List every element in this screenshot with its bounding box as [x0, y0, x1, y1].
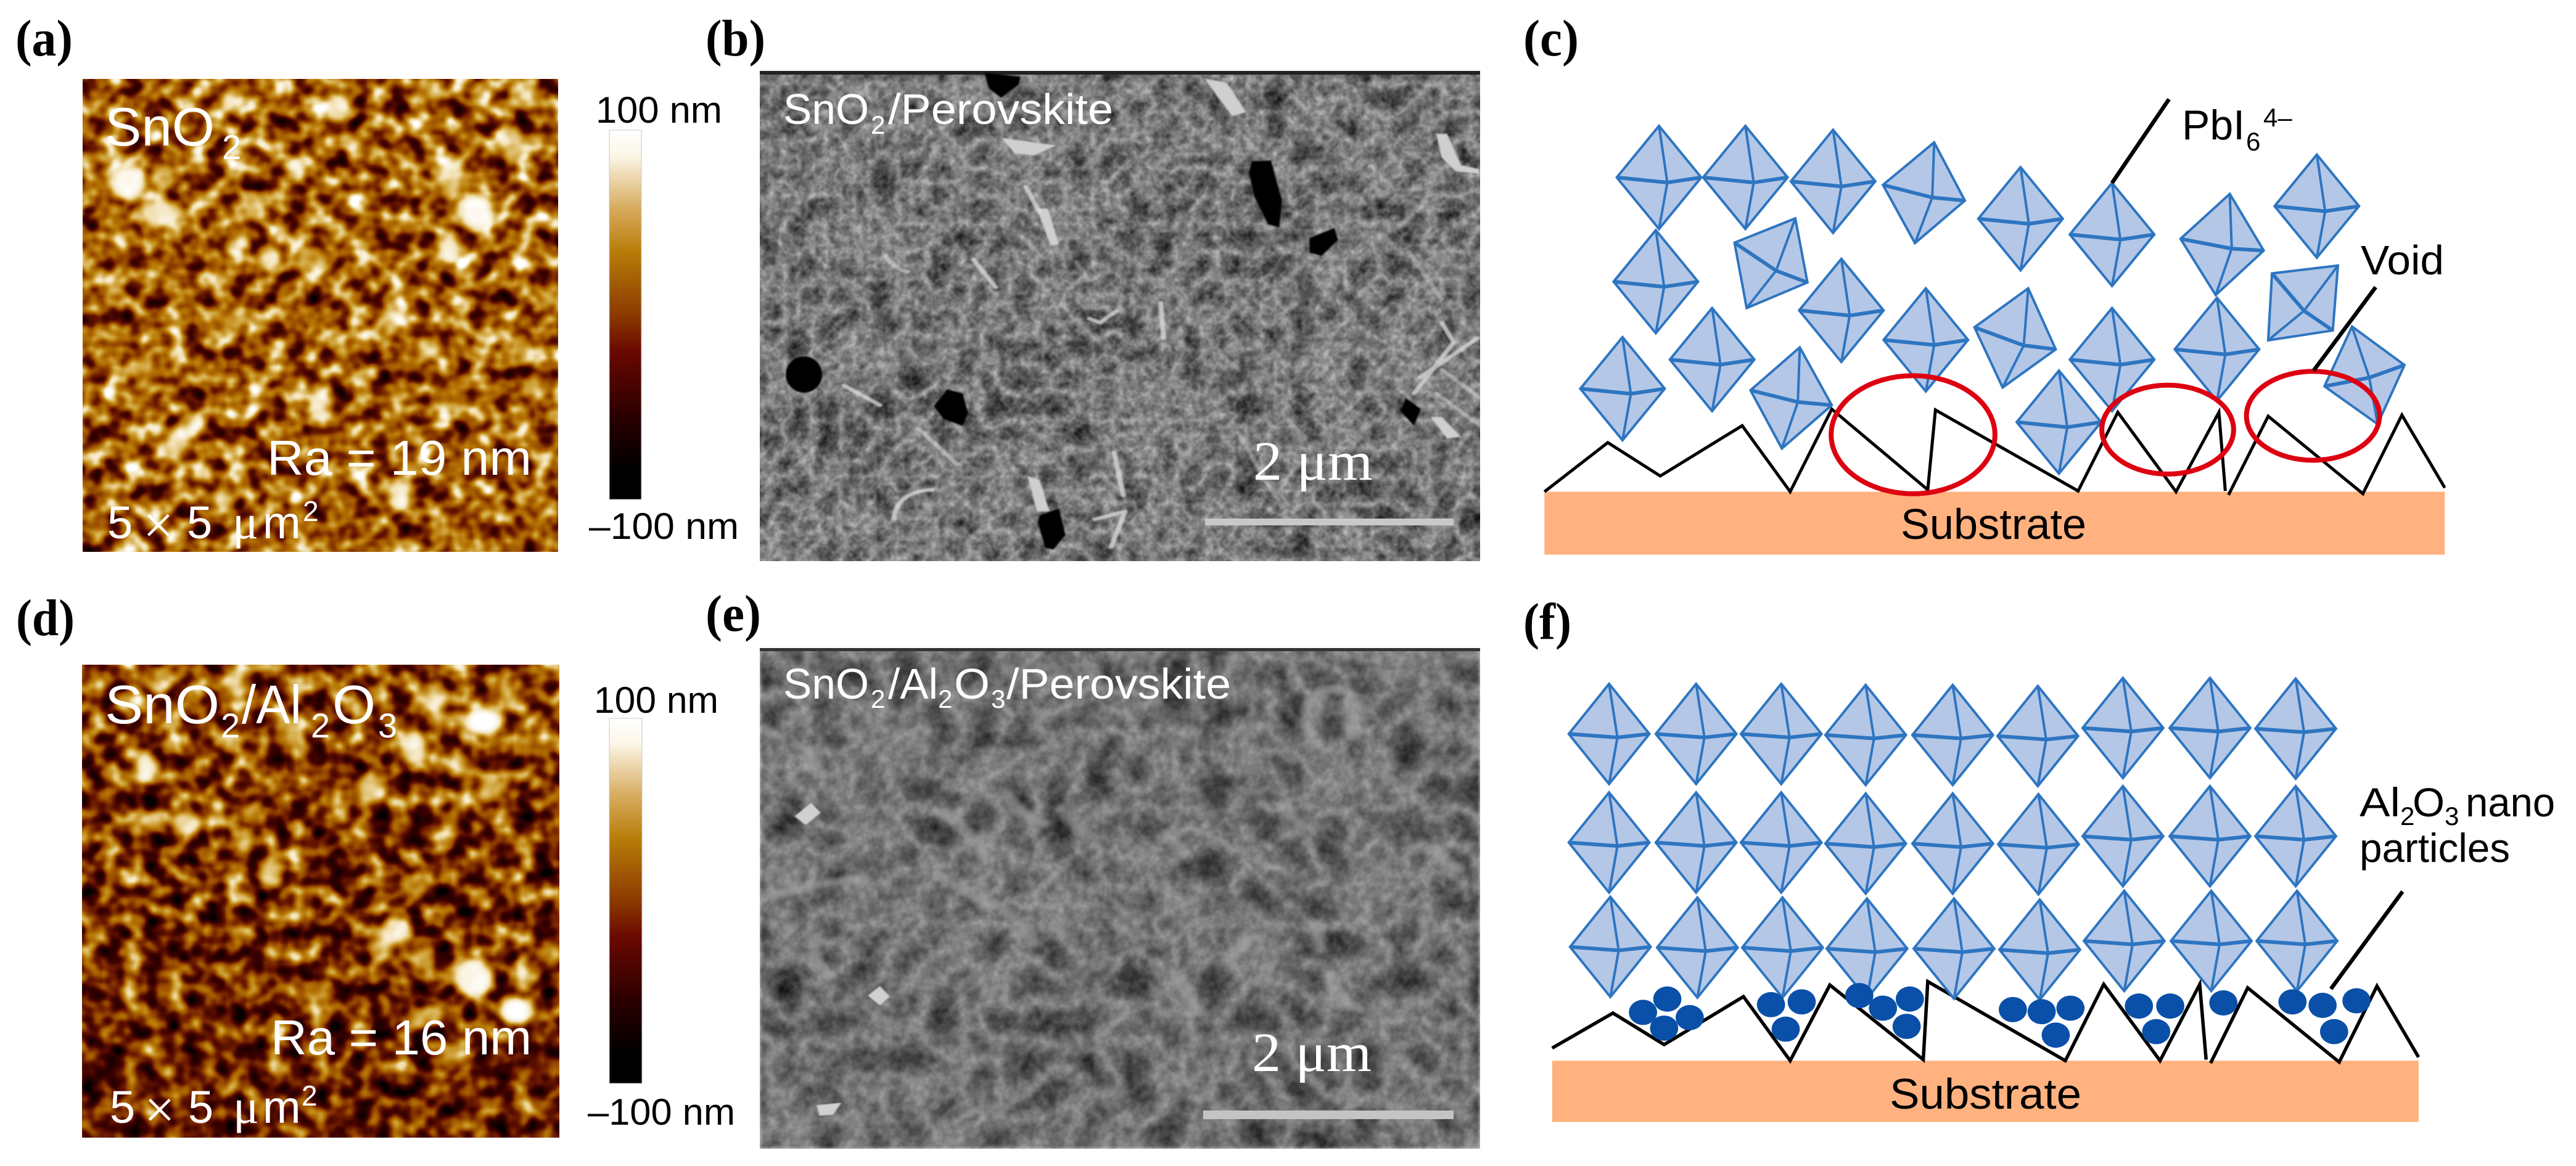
bright particles	[794, 803, 890, 1115]
octahedron	[1825, 685, 1906, 785]
octahedron	[1569, 684, 1650, 784]
octahedron	[1742, 898, 1823, 998]
sample name SnO2/Al2O3: 2	[311, 706, 330, 745]
tilted octahedron	[1750, 347, 1832, 448]
octahedron	[1656, 684, 1737, 784]
roughness value: Ra = 19 nm	[267, 430, 532, 485]
label (b): (b)	[706, 10, 765, 67]
panel b: SEM image SnO2/Perovskite	[760, 71, 1480, 561]
panel d: AFM image of SnO2/Al2O3	[76, 665, 560, 1140]
PbI6 4- label: 4–	[2263, 103, 2292, 132]
octahedron	[1799, 259, 1883, 362]
sample name SnO2/Al2O3: /Al	[242, 674, 302, 735]
PbI6 4- label: PbI	[2182, 102, 2245, 149]
image caption	[783, 85, 1113, 139]
image caption: 3	[991, 684, 1005, 713]
substrate text f: Substrate	[1890, 1070, 2081, 1118]
image caption: SnO	[783, 85, 869, 133]
scan size: 2	[303, 495, 319, 527]
octahedron	[2083, 678, 2163, 778]
colour bar d	[588, 679, 735, 1133]
sample name SnO2/Al2O3: 3	[378, 706, 397, 745]
octahedron	[2170, 678, 2250, 778]
octahedron	[2070, 183, 2154, 286]
octahedron	[1741, 684, 1822, 784]
image caption: 2	[938, 684, 952, 713]
octahedron	[2257, 891, 2337, 991]
tilted octahedron near void	[2324, 327, 2405, 424]
Al2O3 nano particles label: particles	[2360, 825, 2510, 871]
octahedron	[2017, 371, 2101, 474]
sample name SnO2: SnO	[105, 96, 215, 157]
octahedron	[1613, 230, 1698, 333]
scan size: ×	[143, 496, 174, 556]
PbI6 4- label	[2182, 102, 2292, 156]
octahedron	[1912, 685, 1993, 785]
octahedron	[2175, 298, 2259, 401]
image caption: O	[954, 660, 990, 708]
octahedron	[1791, 130, 1875, 233]
sample name SnO2/Al2O3	[107, 684, 396, 737]
scan size: μ	[233, 1080, 259, 1133]
octahedron	[1580, 337, 1665, 440]
rough surface line	[1552, 982, 2419, 1063]
octahedron	[1998, 686, 2078, 786]
pointer lines	[2112, 99, 2376, 371]
voids (black pinholes)	[786, 73, 1421, 549]
octahedron	[1670, 308, 1755, 411]
panel a: AFM image of SnO2	[83, 79, 559, 556]
octahedron	[1883, 289, 1968, 392]
panel c: disordered perovskite on rough substrate	[1544, 99, 2445, 555]
Al2O3 nano particles label: O	[2413, 779, 2445, 825]
image caption: 2	[871, 110, 885, 139]
octahedron	[1741, 792, 1822, 893]
bright flakes and ridges	[844, 79, 1479, 547]
octahedron	[2170, 786, 2250, 886]
octahedron	[1998, 794, 2079, 894]
scan size: 5	[107, 497, 133, 548]
scan size: 5	[110, 1082, 135, 1133]
scan size: m	[263, 497, 301, 548]
Al2O3 nano particles label: Al	[2360, 779, 2400, 825]
octahedron	[1825, 794, 1906, 893]
octahedron	[2255, 679, 2336, 779]
sample name SnO2	[107, 107, 239, 159]
image caption: SnO	[783, 660, 869, 708]
octahedron	[1827, 898, 1907, 999]
octahedron	[1914, 898, 1994, 999]
Al2O3 nanoparticles	[1629, 983, 2371, 1048]
colour bar top value: 100 nm	[594, 679, 718, 721]
image caption: 2	[871, 684, 885, 713]
panel f: ordered perovskite with Al2O3 nanoparticles	[1552, 678, 2419, 1122]
octahedron	[1617, 126, 1702, 229]
roughness value: Ra = 16 nm	[271, 1010, 532, 1065]
octahedron	[2255, 786, 2336, 886]
colour bar a	[589, 89, 739, 547]
scan size: ×	[144, 1080, 175, 1140]
octahedron	[2083, 786, 2163, 886]
substrate bar	[1544, 492, 2445, 555]
colour bar bottom value: –100 nm	[589, 506, 739, 547]
octahedron	[1999, 900, 2080, 1000]
Al2O3 nano particles label: 2	[2400, 802, 2414, 831]
scale bar label: 2 μm	[1253, 431, 1373, 492]
image caption: /Al	[888, 660, 938, 708]
rotated octahedron	[2268, 266, 2338, 340]
octahedron	[1570, 897, 1651, 997]
panel e: SEM image SnO2/Al2O3/Perovskite	[760, 648, 1480, 1149]
octahedron	[2171, 891, 2252, 991]
image caption	[783, 660, 1231, 713]
tilted octahedron	[1975, 289, 2055, 387]
label (e): (e)	[706, 585, 761, 643]
octahedron	[1978, 167, 2063, 270]
pointer line	[2331, 892, 2403, 989]
sample name SnO2/Al2O3: O	[332, 674, 376, 735]
substrate bar	[1552, 1061, 2419, 1122]
PbI6 4- label: 6	[2246, 127, 2260, 156]
colour bar bottom value: –100 nm	[588, 1091, 735, 1133]
Al2O3 nano particles label: 3	[2445, 802, 2459, 831]
octahedron	[2084, 891, 2165, 991]
void label: Void	[2361, 237, 2444, 284]
octahedron	[1569, 792, 1650, 893]
sample name SnO2/Al2O3: SnO	[105, 674, 220, 735]
scan size: μ	[232, 495, 258, 549]
rough SnO2 surface line	[1544, 409, 2445, 495]
scale bar label: 2 μm	[1252, 1022, 1372, 1083]
image caption: /Perovskite	[1006, 660, 1231, 708]
octahedron	[2274, 155, 2359, 258]
octahedron	[1656, 792, 1737, 893]
scale bar	[1205, 519, 1454, 525]
octahedron	[1912, 794, 1993, 893]
red void markers	[1831, 371, 2379, 494]
Al2O3 nano particles label	[2360, 779, 2555, 871]
colour bar top value: 100 nm	[596, 89, 722, 131]
label (c): (c)	[1523, 10, 1579, 67]
octahedron	[1657, 898, 1738, 998]
scan size: 5	[188, 1082, 213, 1133]
image caption: /Perovskite	[888, 85, 1113, 133]
scan size: 5	[187, 497, 212, 548]
label (f): (f)	[1523, 593, 1571, 651]
tilted octahedron	[2181, 194, 2264, 295]
ordered octahedra	[1569, 678, 2337, 1000]
scan size: m	[263, 1082, 301, 1133]
sample name SnO2: 2	[222, 128, 241, 166]
sample name SnO2/Al2O3: 2	[221, 706, 240, 745]
label (d): (d)	[16, 589, 75, 647]
label (a): (a)	[15, 10, 73, 67]
Al2O3 nano particles label: nano	[2466, 779, 2555, 825]
scan size: 2	[302, 1080, 318, 1112]
octahedron	[1703, 126, 1788, 229]
rotated octahedron	[1735, 218, 1808, 308]
tilted octahedron	[1883, 142, 1965, 243]
PbI6 octahedra	[1580, 126, 2405, 474]
substrate text c: Substrate	[1901, 500, 2086, 548]
soft ridges	[764, 688, 1458, 1012]
scale bar	[1203, 1111, 1454, 1119]
octahedron	[2070, 308, 2154, 411]
